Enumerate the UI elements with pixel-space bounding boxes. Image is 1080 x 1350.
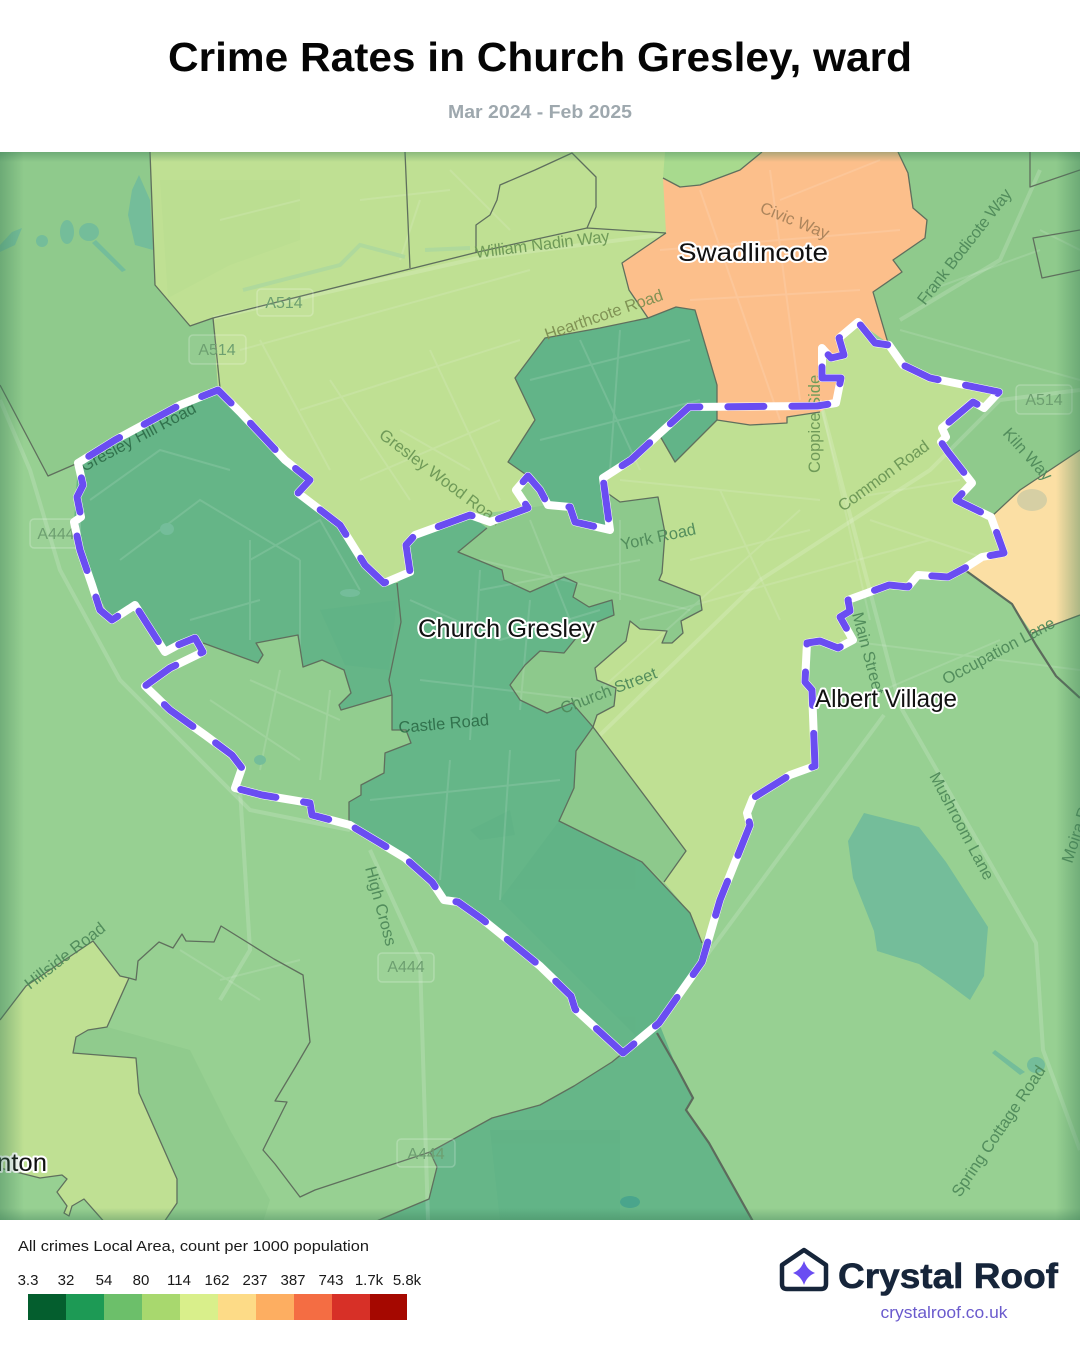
legend tick labels: 743 — [318, 1272, 344, 1289]
area: Swadlincote — [622, 152, 927, 425]
road labels: Hillside Road — [21, 919, 109, 993]
area: south-west ward neighbourhood — [145, 635, 411, 823]
wordmark: Crystal Roof — [838, 1257, 1058, 1296]
choropleth map — [0, 152, 1080, 1225]
road labels: Mushroom Lane — [925, 769, 997, 883]
road shield: A444 west: A444 — [37, 526, 75, 543]
map background area — [0, 152, 1080, 1220]
road shield: A444 south: A444 — [387, 959, 425, 976]
road labels: William Nadin Way — [474, 228, 611, 262]
icon: house with star — [782, 1250, 826, 1289]
road shield: A514 east: A514 — [1025, 392, 1063, 409]
map edge vignette — [0, 152, 1080, 1220]
road labels: Common Road — [835, 437, 933, 515]
ward boundary: purple dashes — [74, 322, 1004, 1053]
title: Crime Rates in Church Gresley, ward — [168, 34, 912, 80]
legend tick labels: 1.7k — [355, 1272, 384, 1289]
area: north-east neighbourhood — [873, 152, 1080, 517]
road shield: A444 west — [30, 519, 80, 548]
legend colour scale — [28, 1294, 407, 1320]
subtitle: date range: Mar 2024 - Feb 2025 — [448, 101, 632, 122]
railway line — [657, 570, 1080, 1225]
legend tick labels: 114 — [167, 1272, 191, 1289]
legend tick labels: 387 — [280, 1272, 306, 1289]
legend tick labels: 80 — [133, 1272, 149, 1289]
legend tick labels: 54 — [96, 1272, 112, 1289]
legend tick labels: 32 — [58, 1272, 74, 1289]
water bodies — [0, 175, 1045, 1208]
north stream — [243, 245, 470, 290]
legend tick labels: 3.3 — [18, 1272, 38, 1289]
ward boundary: white base — [74, 322, 1004, 1053]
legend tick labels: 5.8k — [393, 1272, 422, 1289]
area: central dark neighbourhood — [349, 515, 702, 1053]
road labels — [21, 185, 1080, 1200]
road labels: Gresley Hill Road — [77, 399, 199, 476]
road shield: A514 west — [257, 289, 313, 316]
road labels: Church Street — [558, 664, 660, 718]
area: east-centre yellow-green — [593, 322, 1004, 943]
area: north-west neighbourhood — [0, 152, 218, 476]
road shield: A514 east — [1016, 385, 1072, 414]
area: York Road neighbourhood — [458, 490, 702, 727]
road labels: Hearthcote Road — [542, 286, 666, 344]
road shield: A514 west: A514 — [265, 295, 303, 312]
area: south-west yellow-green — [0, 941, 177, 1225]
place label: Church Gresley: Church Gresley — [418, 615, 596, 643]
legend caption: All crimes Local Area, count per 1000 population — [18, 1238, 369, 1255]
road labels: High Cross — [361, 864, 400, 948]
field patch in north neighbourhood — [160, 180, 300, 298]
place label: Swadlincote: Swadlincote — [678, 239, 828, 267]
road labels: Occupation Lane — [939, 614, 1058, 689]
legend tick labels: 237 — [242, 1272, 268, 1289]
area: north neighbourhood — [150, 152, 666, 583]
road labels: Kiln Way — [999, 425, 1056, 485]
road shield: A514 west lower: A514 — [198, 342, 236, 359]
road labels: Main Street — [848, 610, 887, 697]
light quarry patch — [1017, 489, 1047, 511]
main roads — [0, 170, 1080, 1220]
road labels: Civic Way — [758, 199, 832, 243]
road labels: Castle Road — [398, 711, 490, 737]
road shield: A514 west lower — [189, 335, 246, 364]
legend — [18, 1238, 422, 1320]
road labels: Coppice Side — [806, 375, 824, 473]
area shading patches — [320, 600, 702, 1220]
road shield: A444 south — [378, 953, 434, 982]
road labels: Gresley Wood Road — [376, 426, 505, 529]
road shield: A444 bottom — [397, 1139, 455, 1167]
legend tick labels — [18, 1272, 422, 1289]
boundary lines between areas — [0, 152, 1080, 1225]
area: south-west darker patch — [73, 1027, 270, 1225]
road labels: York Road — [619, 520, 698, 554]
minor road network — [90, 160, 1080, 1000]
area: north-centre dark neighbourhood — [508, 307, 717, 530]
road labels: Spring Cottage Road — [948, 1062, 1049, 1200]
road shield: A444 bottom: A444 — [407, 1146, 445, 1163]
road labels: Frank Bodicote Way — [914, 185, 1016, 308]
area: western dark neighbourhood — [74, 390, 401, 710]
area: top strip — [663, 152, 762, 187]
legend tick labels: 162 — [204, 1272, 230, 1289]
place label: Albert Village: Albert Village — [815, 685, 957, 713]
area: south dark neighbourhood — [367, 1023, 755, 1225]
area: east low-rate neighbourhood — [965, 450, 1080, 633]
website link: crystalroof.co.uk — [880, 1304, 1008, 1322]
area: central-south neighbourhood — [559, 727, 686, 882]
logo: Crystal Roof — [782, 1250, 1058, 1322]
